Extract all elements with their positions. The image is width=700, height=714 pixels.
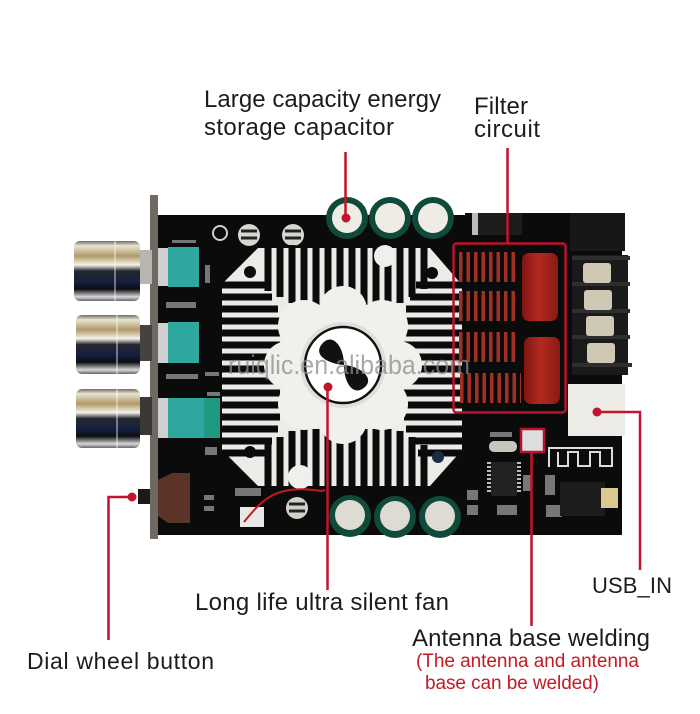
watermark: ruiqlic.en.alibaba.com [228, 350, 470, 380]
teal potentiometers [158, 247, 220, 438]
large capacitors bottom row [329, 495, 461, 538]
label: capacitor: Large capacity energy [204, 86, 441, 113]
icon: top knob [74, 241, 152, 301]
icon: middle knob [76, 315, 152, 374]
label: filter circuit: circuit [474, 116, 540, 143]
label: dial wheel: Dial wheel button [27, 648, 214, 674]
callout line: fan [324, 382, 332, 590]
audio jack [560, 482, 618, 516]
note: antenna: base can be welded) [425, 673, 599, 694]
callout box: filter circuit [454, 244, 566, 412]
callout line: filter [506, 148, 509, 243]
panel: front metal plate [150, 195, 158, 539]
panel: circuit board [158, 213, 622, 535]
dial wheel [138, 473, 190, 523]
IC chip [487, 462, 521, 496]
label: filter circuit: Filter [474, 93, 528, 120]
icon: bottom knob [76, 389, 152, 448]
label: antenna: Antenna base welding [412, 625, 650, 652]
antenna trace [549, 448, 612, 467]
crystal [489, 441, 517, 452]
filter inductors [459, 267, 521, 388]
note: antenna: (The antenna and antenna [416, 651, 639, 672]
large capacitors top row [326, 197, 454, 239]
USB connector [568, 384, 625, 436]
icon: cooling fan [264, 286, 422, 444]
callout line: USB [592, 408, 640, 570]
label: USB: USB_IN [592, 573, 672, 598]
small electrolytic capacitors [213, 224, 308, 519]
label: fan: Long life ultra silent fan [195, 589, 449, 616]
antenna base marker [521, 429, 544, 452]
power jack [570, 213, 625, 251]
terminal block [572, 255, 632, 375]
label: capacitor: storage capacitor [204, 114, 394, 141]
callout line: capacitor [342, 152, 350, 222]
filter capacitors [522, 253, 560, 404]
diode [472, 213, 522, 235]
silkscreen markings [166, 240, 562, 517]
heatsink [220, 245, 464, 489]
callout line: dial wheel [108, 492, 136, 640]
fan connector and wire [240, 489, 325, 527]
white mounting posts [288, 245, 396, 489]
callout line: antenna [530, 452, 533, 626]
